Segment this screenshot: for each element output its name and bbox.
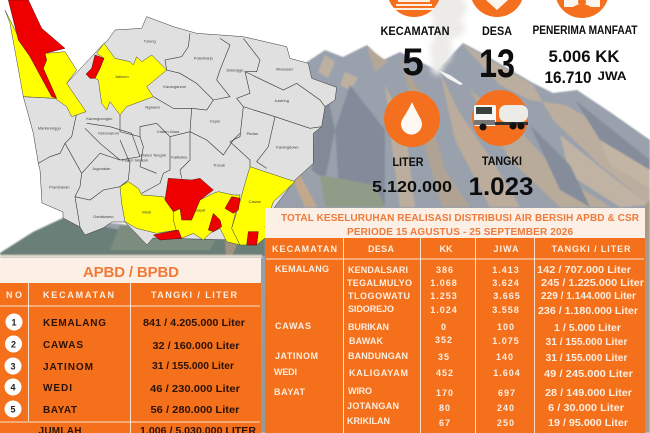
kecamatan column: CAWAS bbox=[275, 321, 312, 331]
jiwa column: 3.558 bbox=[492, 305, 520, 315]
label: penerima manfaat: PENERIMA MANFAAT bbox=[532, 25, 638, 37]
tangki / liter column: 28 / 149.000 Liter bbox=[545, 388, 632, 399]
tangki / liter column: 19 / 95.000 Liter bbox=[548, 418, 628, 429]
table rows: CAWAS bbox=[43, 340, 83, 351]
district names: Karangnongko bbox=[86, 116, 113, 121]
KK column: 67 bbox=[439, 418, 451, 428]
table header row: DESA bbox=[368, 244, 394, 254]
tangki / liter column: 31 / 155.000 Liter bbox=[546, 353, 628, 364]
jiwa column: 1.075 bbox=[492, 336, 520, 346]
district borders bbox=[38, 33, 325, 227]
jiwa column bbox=[492, 265, 521, 428]
table header row bbox=[272, 244, 631, 254]
table rows: WEDI bbox=[43, 383, 72, 394]
desa column: KRIKILAN bbox=[347, 416, 391, 426]
icon: water drop bbox=[384, 91, 440, 147]
table rows: 31 / 155.000 Liter bbox=[152, 361, 234, 372]
KK column: 1.068 bbox=[430, 278, 458, 288]
district names: Pedan bbox=[247, 131, 258, 136]
icon: desa location pin bbox=[470, 0, 524, 17]
yellow districts: Kemalang, Jatinom, Wedi, Bayat, Cawas bbox=[5, 10, 295, 245]
jiwa column: 3.665 bbox=[493, 291, 521, 301]
district names: Jatinom bbox=[115, 74, 129, 79]
district names: Gantiwarno bbox=[93, 214, 114, 219]
desa column: BAWAK bbox=[349, 336, 384, 346]
table header row: KK bbox=[440, 244, 453, 254]
district names: Manisrenggo bbox=[38, 125, 62, 130]
district names: Klaten Utara bbox=[157, 129, 180, 134]
tangki / liter column: 6 / 30.000 Liter bbox=[548, 403, 624, 414]
district names: Klaten Selatan bbox=[122, 158, 148, 163]
district names: Kalikotes bbox=[171, 155, 187, 160]
KK column: 386 bbox=[436, 265, 454, 275]
desa column: BURIKAN bbox=[348, 322, 390, 332]
panel: total realisasi table bbox=[265, 208, 645, 433]
district names: Wonosari bbox=[276, 67, 293, 72]
number: tangki: 1.023 bbox=[468, 173, 534, 201]
table header row: KECAMATAN bbox=[43, 290, 114, 300]
table rows: 841 / 4.205.000 Liter bbox=[143, 318, 245, 329]
kecamatan column bbox=[274, 264, 330, 397]
district names: Trucuk bbox=[213, 163, 225, 168]
district names: Jogonalan bbox=[92, 166, 111, 171]
desa column: BANDUNGAN bbox=[348, 351, 409, 361]
district names: Bayat bbox=[195, 207, 206, 212]
table header row: TANGKI / LITER bbox=[552, 244, 631, 254]
jiwa column: 1.604 bbox=[493, 368, 521, 378]
table rows: JATINOM bbox=[43, 362, 93, 373]
jiwa column: 140 bbox=[496, 352, 514, 362]
table header row bbox=[6, 290, 238, 300]
desa column: SIDOREJO bbox=[348, 304, 395, 314]
jiwa column: 1.413 bbox=[492, 265, 520, 275]
number badges bbox=[4, 314, 22, 418]
district names: Juwiring bbox=[274, 98, 289, 103]
district names: Klaten Tengah bbox=[141, 153, 166, 158]
total row bbox=[38, 426, 257, 433]
KK column: 170 bbox=[436, 388, 454, 398]
KK column: 80 bbox=[439, 403, 451, 413]
panel: APBD / BPBD table bbox=[0, 258, 261, 433]
icon: water tanker truck bbox=[472, 90, 528, 146]
district names: Ceper bbox=[210, 118, 221, 123]
label: liter: LITER bbox=[392, 155, 424, 169]
table header row: KECAMATAN bbox=[272, 244, 337, 254]
tangki / liter column: 31 / 155.000 Liter bbox=[546, 337, 628, 348]
table rows: BAYAT bbox=[43, 405, 77, 416]
label: desa: DESA bbox=[482, 26, 512, 38]
district names: Cawas bbox=[249, 199, 261, 204]
map of Klaten regency bbox=[5, 0, 337, 245]
number: liter: 5.120.000 bbox=[372, 179, 452, 196]
label: kecamatan: KECAMATAN bbox=[380, 26, 450, 38]
number badges: 4 bbox=[10, 382, 16, 392]
number: desa: 13 bbox=[479, 42, 515, 86]
KK column: 352 bbox=[435, 335, 453, 345]
number badges: 2 bbox=[11, 340, 16, 350]
district names: Polanharjo bbox=[194, 55, 214, 60]
table rows bbox=[43, 318, 245, 416]
icon: penerima manfaat people bbox=[555, 0, 609, 18]
table header row: NO bbox=[6, 290, 22, 300]
desa column bbox=[347, 265, 413, 426]
heading: total keseluruhan: TOTAL KESELURUHAN REALISASI DISTRIBUSI AIR BERSIH APBD & CSR bbox=[281, 213, 640, 224]
district names: Karanganom bbox=[163, 84, 187, 89]
desa column: WIRO bbox=[348, 386, 373, 396]
red villages bbox=[8, 0, 258, 245]
KK column: 1.024 bbox=[430, 305, 458, 315]
table rows: 32 / 160.000 Liter bbox=[152, 341, 240, 352]
district names: Kebonarum bbox=[98, 131, 120, 136]
tangki / liter column: 229 / 1.144.000 Liter bbox=[541, 291, 636, 302]
number: jiwa bbox=[544, 68, 627, 87]
KK column: 452 bbox=[436, 368, 454, 378]
heading: APBD / BPBD: APBD / BPBD bbox=[83, 264, 179, 281]
table header row: TANGKI / LITER bbox=[151, 290, 238, 300]
district names: Karangdowo bbox=[276, 145, 299, 150]
KK column: 35 bbox=[438, 352, 450, 362]
heading: total keseluruhan: PERIODE 15 AGUSTUS - 25 SEPTEMBER 2026 bbox=[347, 227, 573, 238]
KK column: 1.253 bbox=[430, 291, 458, 301]
table header row: JIWA bbox=[494, 244, 519, 254]
smoke plume bbox=[427, 0, 467, 85]
jiwa column: 3.624 bbox=[492, 278, 520, 288]
jiwa column: 240 bbox=[497, 403, 515, 413]
number: jiwa: 16.710 bbox=[544, 68, 592, 87]
tangki / liter column: 49 / 245.000 Liter bbox=[544, 369, 633, 380]
heading: total keseluruhan bbox=[281, 213, 640, 238]
district names: Delanggu bbox=[226, 68, 244, 73]
tangki / liter column bbox=[537, 265, 644, 429]
desa column: KENDALSARI bbox=[348, 265, 409, 275]
desa column: TLOGOWATU bbox=[348, 291, 411, 301]
jiwa column: 250 bbox=[497, 418, 515, 428]
tangki / liter column: 142 / 707.000 Liter bbox=[537, 265, 631, 276]
desa column: KALIGAYAM bbox=[349, 368, 409, 378]
district names: Tulung bbox=[144, 39, 156, 44]
kecamatan column: KEMALANG bbox=[275, 264, 330, 274]
tangki / liter column: 245 / 1.225.000 Liter bbox=[541, 278, 644, 289]
number badges: 1 bbox=[11, 318, 17, 328]
gray districts bbox=[23, 17, 337, 245]
district names: Wedi bbox=[142, 209, 151, 214]
kecamatan column: JATINOM bbox=[275, 351, 319, 361]
jiwa column: 100 bbox=[497, 322, 515, 332]
tangki / liter column: 236 / 1.180.000 Liter bbox=[538, 306, 638, 317]
number: jiwa: JWA bbox=[598, 69, 627, 83]
desa column: TEGALMULYO bbox=[347, 278, 413, 288]
kecamatan column: WEDI bbox=[274, 367, 298, 377]
desa column: JOTANGAN bbox=[347, 401, 400, 411]
district names: Ngawen bbox=[145, 105, 160, 110]
icon: kecamatan building bbox=[387, 0, 441, 17]
KK column bbox=[430, 265, 458, 428]
number: KK: 5.006 KK bbox=[548, 47, 620, 66]
district names bbox=[38, 39, 299, 219]
table rows: KEMALANG bbox=[43, 318, 106, 329]
jiwa column: 697 bbox=[498, 388, 516, 398]
tangki / liter column: 1 / 5.000 Liter bbox=[554, 323, 621, 334]
number badges: 3 bbox=[10, 362, 16, 372]
table rows: 46 / 230.000 Liter bbox=[150, 384, 240, 395]
table rows: 56 / 280.000 Liter bbox=[150, 405, 240, 416]
number: kecamatan: 5 bbox=[402, 41, 424, 84]
number badges: 5 bbox=[10, 404, 16, 414]
kecamatan column: BAYAT bbox=[274, 387, 306, 397]
label: tangki: TANGKI bbox=[482, 154, 522, 168]
district names: Prambanan bbox=[49, 184, 70, 189]
KK column: 0 bbox=[441, 322, 447, 332]
